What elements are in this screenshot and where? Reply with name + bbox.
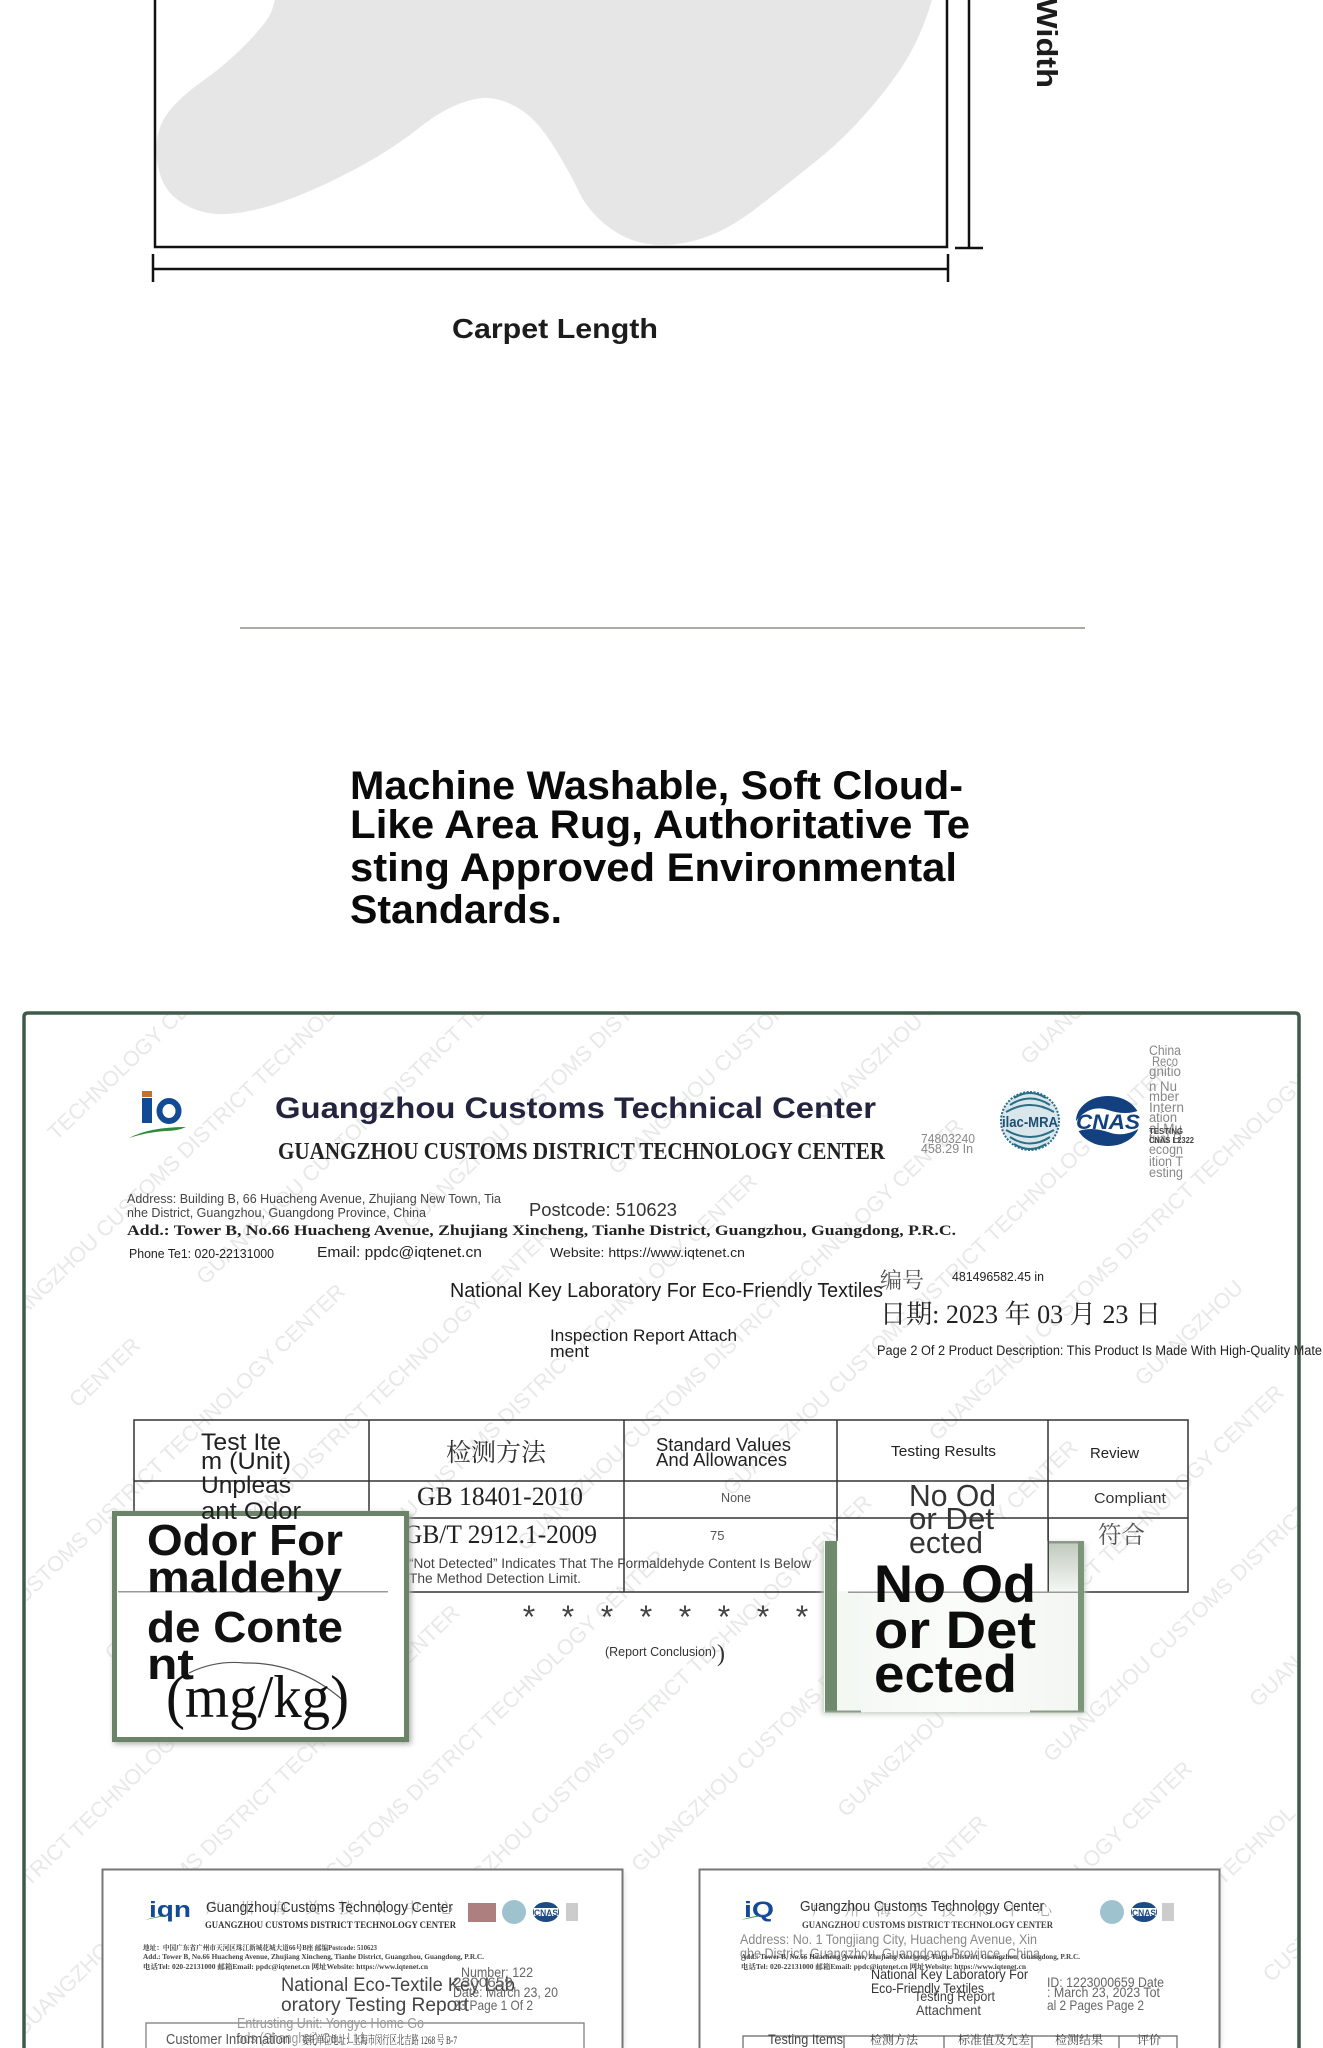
entrusting unit: Entrusting Unit: Yongye Home Go — [237, 2015, 424, 2032]
address: nhe District, Guangzhou, Guangdong Province, China — [127, 1206, 426, 1220]
recognition number column: esting — [1149, 1165, 1183, 1180]
thumbnail small print: 电话Tel: 020-22131000 邮箱Email: ppdc@iqtenet.cn 网址Website: https://www.iqtenet.cn — [741, 1962, 1026, 1971]
callout frame — [114, 1514, 406, 1740]
logo: iqn — [149, 1897, 191, 1922]
phone: Phone Te1: 020-22131000 — [129, 1246, 274, 1261]
panel: certificate frame: GUANGZHOU CUSTOMS DISTRICT TECHNOLOGY — [924, 1069, 1312, 1445]
thumbnail seals: CNAS — [534, 1908, 558, 1918]
entrusting unit: ods (Shanghai) Co., Ltd. — [237, 2030, 367, 2047]
thumbnail lab name: National Key Laboratory For — [871, 1966, 1028, 1982]
english address: Add.: Tower B, No.66 Huacheng Avenue, Zhujiang Xincheng, Tianhe District, Guangzhou, Guangdong, P.R.C. — [127, 1223, 956, 1239]
review values: 符合 — [1098, 1522, 1145, 1549]
recognition number column: ation — [1149, 1110, 1177, 1125]
sheet — [700, 1870, 1220, 2048]
length label: Carpet Length — [452, 313, 658, 344]
panel: certificate frame: GUANGZHOU CUSTOMS DISTRICT — [603, 911, 879, 1179]
recognition number column: al Mu — [1149, 1121, 1182, 1136]
icon: CNAS seal: CNAS — [1076, 1111, 1140, 1134]
footnote — [409, 1556, 811, 1586]
panel background — [24, 1013, 1299, 2048]
entrusting unit — [238, 2017, 424, 2046]
thumbnail report number: Number: 122 — [461, 1964, 533, 1980]
address: Address: Building B, 66 Huacheng Avenue, Zhujiang New Town, Tia — [127, 1192, 501, 1206]
thumbnail seals — [1100, 1900, 1174, 1924]
standard values: 75 — [710, 1528, 724, 1543]
callout text: maldehy — [147, 1553, 343, 1602]
footnote: “Not Detected” Indicates That The Formaldehyde Content Is Below — [409, 1556, 811, 1571]
method values — [404, 1482, 597, 1549]
callout text: nt — [147, 1640, 194, 1689]
width dimension line — [955, 0, 983, 248]
regular result text: No Od — [909, 1478, 996, 1513]
thumbnail lab name: Eco-Friendly Textiles — [871, 1980, 984, 1996]
recognition number column: Intern — [1149, 1100, 1184, 1115]
rug silhouette — [156, 0, 932, 245]
callout text: Odor For — [147, 1516, 343, 1565]
thumbnail table — [743, 2036, 1177, 2048]
panel: certificate frame: CENTER — [499, 1920, 580, 2000]
method values: GB 18401-2010 — [417, 1482, 583, 1511]
thumbnail name: Guangzhou Customs Technology Center — [206, 1900, 453, 1916]
footnote: The Method Detection Limit. — [409, 1571, 581, 1586]
serial number: 481496582.45 in — [952, 1269, 1044, 1284]
CNAS testing number: CNAS L2322 — [1149, 1136, 1195, 1145]
section divider — [240, 627, 1085, 629]
callout text: de Conte — [147, 1603, 343, 1652]
thumbnail english name: GUANGZHOU CUSTOMS DISTRICT TECHNOLOGY CENTER — [802, 1921, 1053, 1931]
laboratory name: National Key Laboratory For Eco-Friendly Textiles — [450, 1280, 883, 1302]
stars row: * — [523, 1599, 535, 1635]
panel: certificate frame: GUANGZHOU CUSTOMS DISTRICT TECHNOLOGY CENTER — [214, 1545, 670, 1987]
method values: GB/T 2912.1-2009 — [404, 1520, 597, 1549]
bold result text: No Od — [874, 1555, 1036, 1614]
recognition number column: tual R — [1149, 1131, 1182, 1146]
thumbnail table head: 检测结果 — [1055, 2032, 1103, 2047]
thumbnail report id: : March 23, 2023 Tot — [1047, 1984, 1160, 2000]
thumbnail title — [281, 1974, 515, 2016]
column head: review: Review — [1090, 1445, 1139, 1462]
callout: formaldehyde content — [114, 1513, 411, 1744]
panel: certificate frame: GUANGZHOU CUSTOMS DISTRICT TECHNOLOGY CENTER — [191, 847, 648, 1289]
ghost chinese name: 广州海关技术中心 — [812, 1902, 1053, 1919]
bold result text — [874, 1555, 1036, 1704]
review values — [1094, 1490, 1167, 1549]
icon: ilac-MRA seal — [1001, 1092, 1059, 1150]
thumbnail report title — [914, 1991, 995, 2015]
ghost chinese name: 广州海关技术中心 — [206, 1900, 454, 1917]
column head: standard values: Standard Values — [656, 1435, 791, 1455]
panel: certificate frame: GUAN — [1244, 1650, 1306, 1712]
panel: certificate frame: GUANGZHOU CUSTOMS DISTRICT TECHNOLOGY CENTER — [397, 792, 854, 1234]
report conclusion — [605, 1641, 725, 1667]
recognition number column: China — [1149, 1043, 1181, 1058]
table grid — [134, 1420, 1188, 1592]
stars row: * — [640, 1599, 652, 1635]
thumbnail table head: 检测方法 — [870, 2032, 919, 2047]
thumbnail report number: 2300659 — [453, 1974, 513, 1990]
panel: certificate frame: GUANGZHOU CUSTOMS DISTRICT TECHNOLOGY CENTER — [832, 1380, 1288, 1822]
panel: certificate frame: GUANGZHOU CUSTOMS DISTRICT TECHNOLOGY CENTER — [512, 1113, 968, 1555]
recognition number column: mber — [1149, 1089, 1179, 1104]
main heading: sting Approved Environmental — [350, 846, 957, 890]
thumbnail english name: GUANGZHOU CUSTOMS DISTRICT TECHNOLOGY CENTER — [205, 1921, 456, 1931]
thumbnail report number: 23 Page 1 Of 2 — [453, 1997, 533, 2013]
column head: test item: Unpleas — [201, 1472, 291, 1499]
thumbnail table head: Testing Items — [768, 2031, 843, 2047]
stars row: * — [562, 1599, 574, 1635]
panel: certificate frame: GUANGZHOU CUSTOMS DISTRICT TECHNOLOGY CENTER — [626, 1435, 1082, 1877]
column head: test method: 检测方法 — [446, 1439, 547, 1467]
thumbnail title: National Eco-Textile Key Lab — [281, 1974, 515, 1996]
review values: Compliant — [1094, 1490, 1167, 1507]
standard values — [710, 1490, 751, 1543]
panel: certificate frame: CENTER — [64, 1332, 145, 1412]
inspection report title — [550, 1327, 737, 1361]
column head: test item: Test Ite — [201, 1429, 281, 1456]
postcode: Postcode: 510623 — [529, 1200, 677, 1220]
icon: CNAS seal — [1076, 1096, 1140, 1146]
customer address: 委托单位地址：上海市闵行区北吉路 1268 号 B-7 — [302, 2032, 457, 2047]
unit: (mg/kg) — [166, 1664, 349, 1730]
CNAS testing number — [1149, 1127, 1195, 1145]
panel: certificate frame: GUANGZHOU CUSTOMS — [809, 930, 1009, 1124]
thumbnail customer table — [146, 2023, 584, 2048]
table row label overlapping callout: ant Odor — [201, 1498, 301, 1525]
thumbnail address lines: 地址：中国广东省广州市天河区珠江新城花城大道66号B座 邮编Postcode: 510623 — [143, 1943, 377, 1952]
report conclusion: ) — [717, 1641, 725, 1667]
inspection report title: ment — [550, 1343, 589, 1361]
recognition number column: gnitio — [1149, 1064, 1181, 1079]
main heading — [350, 764, 970, 932]
regular result text: or Det — [909, 1501, 994, 1536]
recognition number column: n Nu — [1149, 1079, 1177, 1094]
panel: certificate frame: GUANGZHOU CUSTOMS DISTRICT TECHNOLOGY CENTER — [100, 1223, 556, 1665]
serial label: 编号 — [880, 1268, 924, 1293]
recognition number column — [1149, 1043, 1184, 1180]
stars row: * — [796, 1599, 808, 1635]
stars row: * — [601, 1599, 613, 1635]
column head: standard values — [656, 1435, 791, 1470]
column head: test item — [201, 1429, 291, 1499]
website: Website: https://www.iqtenet.cn — [550, 1245, 745, 1260]
bold result text: ected — [874, 1645, 1017, 1704]
thumbnail small print: Add.: Tower B, No.66 Huacheng Avenue, Zhujiang Xincheng, Tianhe District, Guangzhou, Guangdong, P.R.C. — [741, 1953, 1080, 1961]
stars row: * — [757, 1599, 769, 1635]
thumbnail address: Address: No. 1 Tongjiang City, Huacheng Avenue, Xin — [740, 1931, 1037, 1947]
thumbnail report id: al 2 Pages Page 2 — [1047, 1997, 1144, 2013]
stars row: * — [718, 1599, 730, 1635]
test results table — [134, 1420, 1188, 1592]
panel: certificate frame: TECHNOLOGY CENTER — [798, 1810, 992, 1999]
thumbnail address — [740, 1934, 1040, 1961]
recognition number column: ecogn — [1149, 1142, 1183, 1157]
rug outline box — [155, 0, 947, 247]
panel: certificate frame: CUSTOMS DISTRICT TECHNOLOGY CENTER — [0, 1279, 350, 1619]
thumbnail lab name — [872, 1969, 1028, 1996]
column head: test item: m (Unit) — [201, 1448, 291, 1475]
panel: certificate frame: GUANGZHOU CUSTOMS DISTRICT TECHNOLOGY CENTER — [8, 1600, 464, 2042]
document thumbnail: test report page 2 — [700, 1870, 1220, 2048]
panel: certificate frame: GUANGZHOU CUSTOMS DISTRICT — [1038, 1499, 1314, 1767]
main heading: Standards. — [350, 888, 562, 932]
address — [127, 1192, 501, 1220]
standard values: None — [721, 1490, 751, 1505]
main heading: Machine Washable, Soft Cloud- — [350, 764, 963, 808]
column head: standard values: And Allowances — [656, 1450, 787, 1470]
document thumbnail: test report page 1 — [102, 1870, 623, 2048]
thumbnail report title: Attachment — [916, 2002, 981, 2018]
thumbnail address: ghe District, Guangzhou, Guangdong Province, China — [740, 1945, 1040, 1961]
thumbnail address lines: 电话Tel: 020-22131000 邮箱Email: ppdc@iqtenet.cn 网址Website: https://www.iqtenet.cn — [143, 1962, 428, 1971]
bold result text: or Det — [874, 1601, 1036, 1660]
inspection report title: Inspection Report Attach — [550, 1327, 737, 1345]
thumbnail table head: 评价 — [1137, 2033, 1161, 2047]
sheet — [102, 1870, 622, 2048]
panel: certificate frame: DISTRICT TECHNOLOGY CENTER — [928, 1756, 1197, 2017]
thumbnail report number: Date: March 23, 20 — [453, 1984, 558, 2000]
customer information: Customer Information — [166, 2031, 290, 2048]
panel: certificate frame: GUANGZHOU CUSTOMS DISTRICT TECHNOLOGY CENTER — [718, 1058, 1174, 1500]
CNAS testing number: TESTING — [1149, 1127, 1183, 1136]
thumbnail seals: CNAS — [1132, 1908, 1156, 1918]
panel: certificate frame: CUSTOMS DISTRICT TECHNOL — [1052, 1800, 1300, 2041]
panel: certificate frame: GUANGZHOU CUSTOMS DISTRICT TECHNOLOGY CENTER — [306, 1168, 762, 1610]
report code: 458.29 In — [921, 1141, 973, 1156]
callout: no odor detected — [822, 1478, 1085, 1714]
panel: certificate frame: CUST — [1258, 1928, 1317, 1986]
report conclusion: (Report Conclusion) — [605, 1644, 716, 1659]
thumbnail report title: Testing Report — [914, 1988, 995, 2004]
panel: certificate frame: GUANGZHOU — [1130, 1275, 1248, 1390]
logo: iQ — [744, 1897, 774, 1922]
length dimension line — [153, 254, 948, 282]
thumbnail address lines — [143, 1943, 484, 1971]
thumbnail report id — [1047, 1974, 1164, 2013]
thumbnail table head — [768, 2034, 1161, 2047]
panel: certificate frame: GUANGZHOU — [1015, 954, 1134, 1069]
thumbnail seals — [468, 1900, 578, 1924]
report code — [921, 1131, 975, 1156]
carpet size diagram — [153, 0, 1062, 282]
report code: 74803240 — [921, 1131, 975, 1146]
callout frame — [824, 1541, 1083, 1712]
panel: certificate frame: GUANGZHOU CUSTOMS DISTRICT TECHNOLOGY CENTER — [420, 1490, 876, 1932]
icon: io logo — [129, 1091, 186, 1138]
panel: certificate frame: TECHNOLOGY CENTER — [42, 956, 236, 1145]
regular result text: ected — [909, 1525, 983, 1560]
cover over table cell — [838, 1519, 1047, 1591]
icon: ilac-MRA seal: ilac-MRA — [1002, 1114, 1058, 1131]
regular result text — [909, 1478, 996, 1560]
thumbnail small print — [741, 1953, 1080, 1971]
width label: Width — [1030, 0, 1062, 88]
thumbnail name: Guangzhou Customs Technology Center — [800, 1899, 1044, 1915]
stars row: * — [679, 1599, 691, 1635]
panel: certificate frame: CENTER — [705, 1865, 786, 1945]
center name: Guangzhou Customs Technical Center — [275, 1092, 876, 1125]
thumbnail report number — [453, 1964, 558, 2013]
thumbnail address lines: Add.: Tower B, No.66 Huacheng Avenue, Zhujiang Xincheng, Tianhe District, Guangzhou, Guangdong, P.R.C. — [143, 1953, 484, 1961]
recognition number column: Reco — [1152, 1054, 1178, 1069]
column head: testing results: Testing Results — [891, 1443, 996, 1460]
main heading: Like Area Rug, Authoritative Te — [350, 803, 970, 847]
date: 日期: 2023 年 03 月 23 日 — [880, 1300, 1161, 1329]
recognition number column: ition T — [1149, 1154, 1183, 1169]
center name english serif: GUANGZHOU CUSTOMS DISTRICT TECHNOLOGY CENTER — [278, 1139, 886, 1165]
thumbnail title: oratory Testing Report — [281, 1994, 470, 2016]
callout text — [147, 1516, 343, 1689]
thumbnail table head: 标准值及允差 — [958, 2032, 1030, 2047]
panel: certificate frame — [22, 1011, 1322, 2048]
email: Email: ppdc@iqtenet.cn — [317, 1244, 482, 1261]
stars row — [523, 1599, 808, 1635]
thumbnail report id: ID: 1223000659 Date — [1047, 1974, 1164, 1990]
